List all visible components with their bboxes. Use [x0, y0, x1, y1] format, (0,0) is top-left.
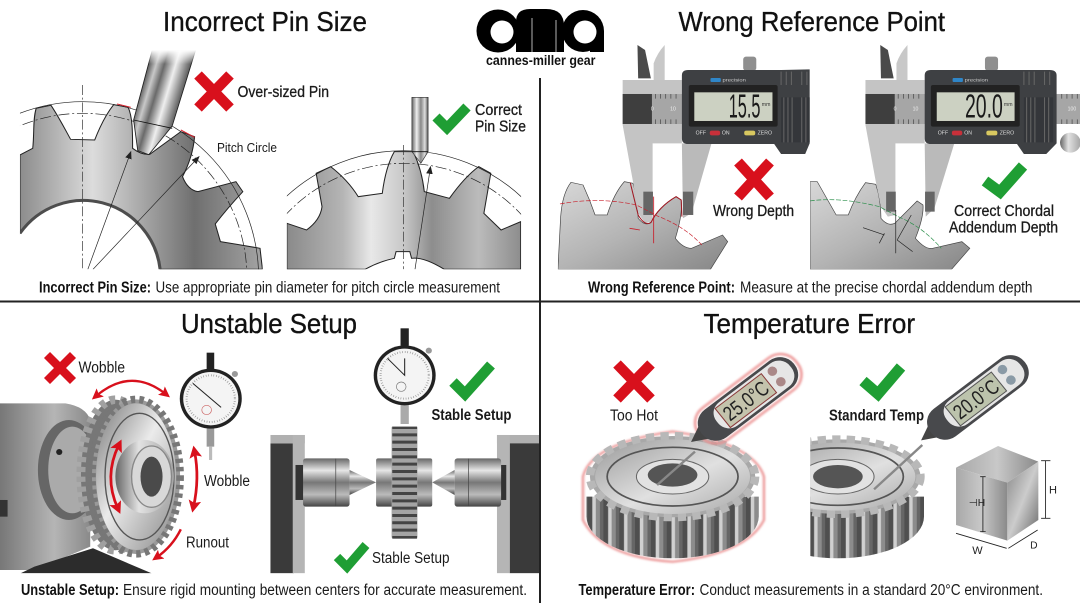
caption: wrong reference point: Wrong Reference Point: — [588, 280, 735, 296]
icon: red cross — [198, 75, 230, 108]
thermometer: 20.0 C — [874, 348, 1036, 489]
dial indicator: wobble side — [180, 353, 242, 460]
diagram: caliper at wrong depth: OFF — [696, 131, 706, 137]
panel: wrong reference point — [558, 6, 1080, 296]
heading: wrong reference point: Wrong Reference Point — [678, 6, 945, 37]
label: stable setup bold: Stable Setup — [432, 407, 512, 424]
icon: red cross — [738, 162, 770, 197]
label: stable setup: Stable Setup — [372, 550, 450, 567]
heading: unstable setup: Unstable Setup — [181, 308, 357, 339]
caption: unstable setup: Ensure rigid mounting between centers for accurate measurement. — [123, 582, 527, 599]
icon: green check — [436, 107, 467, 128]
label: correct pin size: Pin Size — [475, 118, 526, 136]
label: correct chordal addendum depth: Correct Chordal — [954, 203, 1054, 220]
diagram: stable setup between centers — [270, 426, 541, 573]
diagram: caliper at correct chordal depth — [810, 45, 1080, 269]
diagram: cube with dimensions: ⊣H — [969, 498, 985, 509]
icon: green check small — [337, 545, 366, 567]
panel: incorrect pin size — [20, 10, 526, 296]
diagram: cube with dimensions: D — [1030, 540, 1038, 551]
thermometer: 25.0 C — [657, 346, 809, 485]
icon: green check large — [453, 365, 491, 394]
icon: green check — [863, 367, 901, 394]
caption: incorrect pin size: Use appropriate pin diameter for pitch circle measurement — [156, 280, 501, 296]
diagram: caliper at correct chordal depth: 10 — [913, 106, 919, 112]
diagram: caliper at correct chordal depth: ZERO — [1000, 131, 1014, 137]
heading: incorrect pin size: Incorrect Pin Size — [163, 6, 367, 37]
diagram: caliper at correct chordal depth: ON — [964, 131, 972, 137]
label: correct chordal addendum depth — [949, 203, 1058, 236]
diagram: caliper at wrong depth: 10 — [670, 106, 676, 112]
label: wobble top: Wobble — [78, 360, 125, 376]
diagram: caliper at wrong depth: 0 — [651, 106, 654, 112]
panel: unstable setup — [0, 308, 541, 599]
label: runout: Runout — [186, 534, 230, 552]
label: wobble side: Wobble — [204, 473, 250, 490]
diagram: over-sized pin on gear — [20, 50, 263, 270]
caption: incorrect pin size: Incorrect Pin Size: — [39, 280, 151, 296]
icon: red cross — [617, 364, 651, 399]
label: correct pin size: Correct — [475, 102, 523, 119]
diagram: gear wobbling on lathe — [0, 381, 197, 573]
diagram: hot gear — [583, 432, 764, 562]
diagram: caliper at wrong depth: ON — [722, 131, 730, 137]
diagram: caliper at wrong depth: mm — [762, 102, 770, 108]
diagram: caliper at wrong depth: ZERO — [758, 131, 772, 137]
diagram: cube with dimensions — [956, 446, 1057, 557]
diagram: cube with dimensions: H — [1049, 485, 1057, 497]
diagram: caliper at wrong depth: 15.5 — [729, 88, 760, 125]
panel: temperature error — [578, 308, 1057, 599]
diagram: caliper at correct chordal depth: 20.0 — [965, 88, 1003, 125]
logo wordmark: cannes-miller gear — [486, 53, 596, 68]
caption: temperature error: Temperature Error: — [578, 582, 695, 599]
diagram: caliper at correct chordal depth: 100 — [1068, 106, 1076, 112]
label: pitch circle: Pitch Circle — [217, 140, 277, 155]
thermometer: 20.0 C: 20.0°C — [949, 375, 1004, 424]
diagram: correct pin on gear — [286, 97, 522, 270]
diagram: caliper at correct chordal depth: precision — [965, 78, 989, 84]
diagram: caliper at wrong depth: precision — [723, 78, 746, 84]
caption: wrong reference point: Measure at the precise chordal addendum depth — [740, 280, 1032, 296]
diagram: caliper at correct chordal depth: 0 — [894, 106, 897, 112]
icon: red cross — [47, 355, 73, 381]
thermometer: 25.0 C: 25.0°C — [719, 377, 774, 426]
dial indicator: stable setup — [374, 328, 436, 424]
caption: temperature error: Conduct measurements in a standard 20°C environment. — [700, 582, 1043, 599]
label: over-sized pin: Over-sized Pin — [238, 84, 329, 101]
diagram: caliper at correct chordal depth: OFF — [938, 131, 948, 137]
caption: unstable setup: Unstable Setup: — [21, 582, 119, 599]
diagram: caliper at wrong depth — [558, 45, 810, 269]
logo: cannes-miller gear — [476, 9, 604, 68]
label: wrong depth: Wrong Depth — [713, 203, 794, 220]
diagram: caliper at correct chordal depth: mm — [1004, 102, 1013, 108]
diagram: cube with dimensions: W — [972, 545, 983, 557]
heading: temperature error: Temperature Error — [704, 308, 915, 339]
label: standard temp: Standard Temp — [829, 408, 924, 424]
diagram: gear at standard temperature — [810, 435, 925, 558]
label: correct chordal addendum depth: Addendum Depth — [949, 220, 1058, 236]
icon: green check — [985, 166, 1023, 192]
label: correct pin size — [475, 102, 526, 136]
label: too hot: Too Hot — [610, 408, 659, 424]
